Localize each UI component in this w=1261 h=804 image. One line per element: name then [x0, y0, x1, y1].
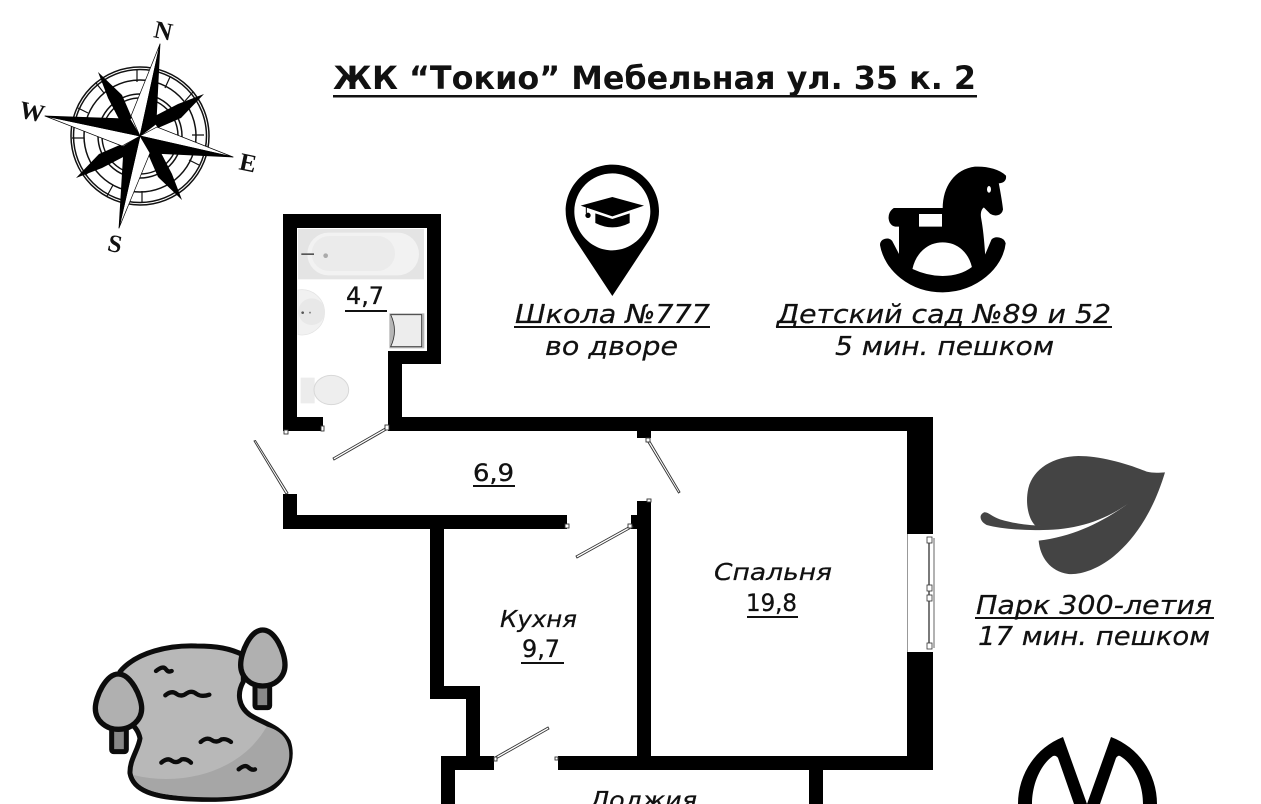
bathtub	[298, 229, 424, 279]
water ripples	[156, 668, 255, 770]
label: bedroom	[714, 560, 832, 618]
compass letters: N	[151, 16, 175, 47]
window: bedroom	[908, 534, 934, 652]
text: kindergarten: Детский сад №89 и 52	[776, 300, 1111, 330]
title: ЖК “Токио” Мебельная ул. 35 к. 2	[333, 59, 976, 97]
tree left	[95, 674, 142, 752]
label: kitchen: Кухня	[500, 607, 577, 633]
text: park: Парк 300-летия	[976, 591, 1212, 621]
text: park: 17 мин. пешком	[978, 622, 1210, 652]
text: school: во дворе	[545, 332, 678, 362]
text: kindergarten: 5 мин. пешком	[835, 332, 1054, 362]
text: kindergarten	[776, 300, 1112, 362]
toilet	[301, 375, 349, 405]
label: bedroom: Спальня	[714, 560, 832, 586]
compass main points	[45, 44, 233, 228]
compass diagonal points	[76, 72, 204, 200]
icon: pond with trees	[95, 630, 290, 799]
icon: leaf	[981, 456, 1165, 574]
pond	[120, 646, 290, 799]
text: school: Школа №777	[515, 300, 710, 330]
label: bedroom: 19,8	[746, 589, 797, 617]
doors	[254, 425, 680, 761]
room labels	[345, 282, 832, 804]
sink	[298, 290, 325, 335]
label: bathroom area: 4,7	[346, 282, 384, 310]
label: hallway area: 6,9	[473, 459, 514, 487]
icon: compass rose	[17, 16, 259, 259]
icon: rocking horse	[881, 167, 1005, 292]
text: park	[975, 591, 1214, 652]
compass letters	[17, 16, 259, 259]
floor plan walls	[283, 214, 933, 804]
label: kitchen	[500, 607, 577, 664]
tree right	[241, 630, 285, 708]
compass rings	[71, 67, 209, 205]
shower cabin	[389, 313, 424, 348]
text: school	[514, 300, 710, 362]
compass letters: E	[237, 149, 259, 178]
icon: school pin	[566, 165, 659, 296]
icon: metro	[1018, 737, 1157, 804]
compass letters: W	[17, 97, 47, 128]
bathroom fixtures	[298, 229, 424, 405]
label: kitchen: 9,7	[522, 635, 560, 663]
compass letters: S	[105, 230, 125, 259]
